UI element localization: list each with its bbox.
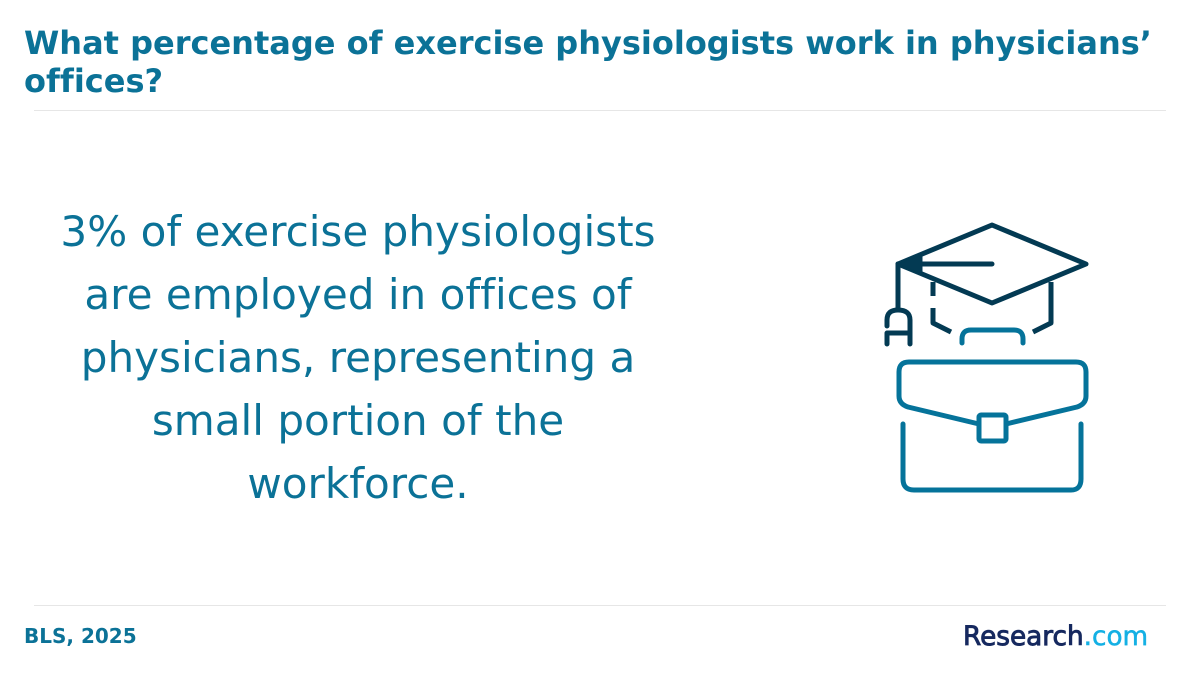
statement text: 3% of exercise physiologists xyxy=(60,207,656,256)
source: BLS, 2025 xyxy=(24,624,137,648)
statement text: physicians, representing a xyxy=(81,333,635,382)
statement text: workforce. xyxy=(247,459,469,508)
logo: Research.com xyxy=(963,622,1148,652)
icon: graduation cap xyxy=(887,225,1086,344)
statement text: are employed in offices of xyxy=(84,270,632,319)
statement text xyxy=(60,207,656,508)
icon: graduation cap and briefcase xyxy=(884,222,1088,492)
icon: briefcase xyxy=(899,330,1086,490)
statement text: small portion of the xyxy=(152,396,564,445)
title: What percentage of exercise physiologists work in physicians’ offices? xyxy=(24,24,1152,100)
